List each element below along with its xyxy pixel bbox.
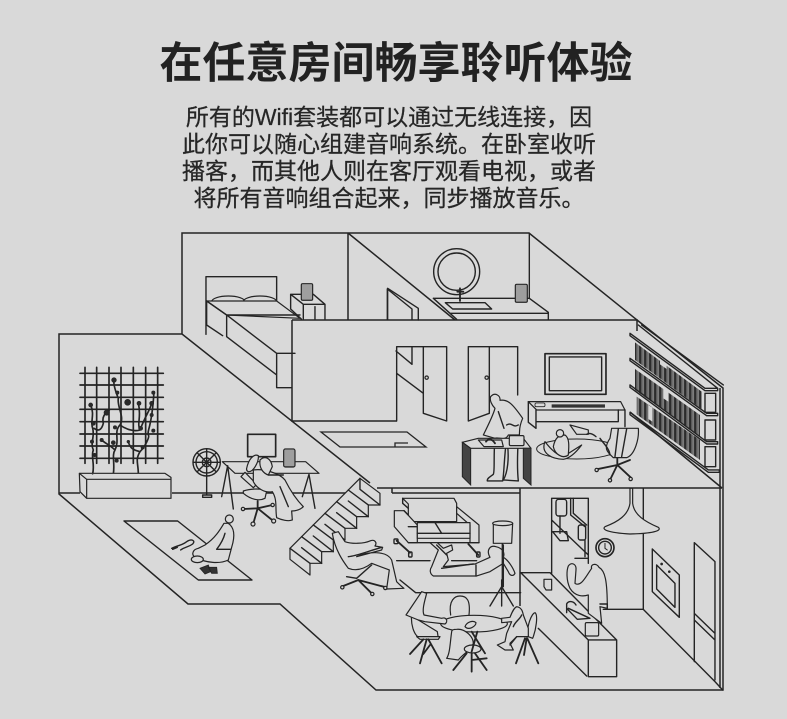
intro text block: 所有的Wifi套装都可以通过无线连接，因 — [186, 104, 592, 130]
yoga mat — [124, 521, 252, 580]
shelf boards — [630, 325, 723, 472]
end boxes on shelves — [705, 393, 716, 467]
panel: desk workspace — [193, 434, 319, 526]
meditating person — [191, 515, 234, 563]
person lying on floor — [430, 543, 515, 576]
computer monitor — [248, 434, 276, 457]
bookshelves — [630, 325, 723, 472]
intro text block: 将所有音响组合起来，同步播放音乐。 — [194, 185, 584, 211]
panel: living room upstairs — [396, 347, 638, 485]
slippers — [200, 565, 217, 574]
standing person at desk — [483, 394, 523, 481]
panel: bathroom — [387, 233, 548, 320]
floor fan — [193, 449, 220, 497]
small door — [388, 288, 418, 320]
floor opening in upper floor — [321, 432, 426, 447]
office chair — [241, 472, 276, 526]
vanity counter with sink — [433, 233, 548, 319]
icon: speaker in bathroom — [515, 284, 527, 302]
person in front on chair — [447, 621, 487, 672]
book rows — [635, 342, 702, 460]
television — [545, 354, 606, 394]
woman seated at left — [406, 592, 447, 663]
sofa — [394, 498, 480, 557]
wall clock — [596, 539, 614, 557]
nightstand — [291, 294, 325, 319]
desk — [222, 462, 319, 509]
panel: yoga area — [124, 478, 404, 596]
back wall line and lamp tripod — [400, 580, 521, 606]
kitchen back wall — [552, 488, 723, 690]
panel: bedroom — [206, 277, 418, 388]
staircase — [290, 478, 380, 575]
child seated at right — [497, 607, 538, 663]
desk in upper room — [462, 436, 531, 485]
panel: sofa area — [394, 498, 515, 587]
title: 在任意房间畅享聆听体验 — [160, 40, 632, 88]
oven — [652, 549, 679, 617]
wall cabinets and shelves — [553, 498, 588, 558]
rug with seated child — [537, 425, 617, 459]
panel: patio plant trellis — [79, 367, 171, 498]
panel: dining area — [400, 580, 538, 672]
icon: speaker on nightstand — [301, 284, 313, 300]
planter box — [79, 473, 171, 498]
back chair — [450, 596, 469, 615]
bed with headboard and pillows — [206, 277, 300, 388]
small door right — [387, 289, 412, 320]
refrigerator — [694, 543, 715, 680]
pendant lamp — [604, 488, 659, 534]
sink faucet — [567, 602, 590, 619]
media console — [528, 402, 625, 428]
round mirror — [434, 249, 480, 295]
cup on counter — [544, 579, 552, 590]
house outline walls and floors — [59, 233, 723, 690]
dining table — [441, 615, 507, 632]
kitchen box — [585, 623, 599, 636]
lounge chair with reader — [332, 532, 404, 596]
trellis grid — [80, 367, 163, 463]
intro text block: 此你可以随心组建音响系统。在卧室收听 — [182, 131, 596, 157]
kitchen counter island — [521, 573, 617, 677]
intro text block — [182, 104, 596, 211]
climbing vines — [89, 378, 155, 474]
panel: kitchen — [521, 488, 723, 690]
rug line behind sofa — [397, 559, 477, 563]
office chair — [595, 428, 638, 482]
person at kitchen counter — [567, 564, 607, 623]
wardrobe doors — [396, 347, 518, 421]
seated person working — [247, 455, 303, 521]
icon: speaker on desk — [284, 449, 295, 467]
intro text block: 播客，而其他人则在客厅观看电视，或者 — [182, 158, 596, 184]
floor lamp — [493, 521, 513, 587]
earphones on mat — [172, 540, 194, 550]
